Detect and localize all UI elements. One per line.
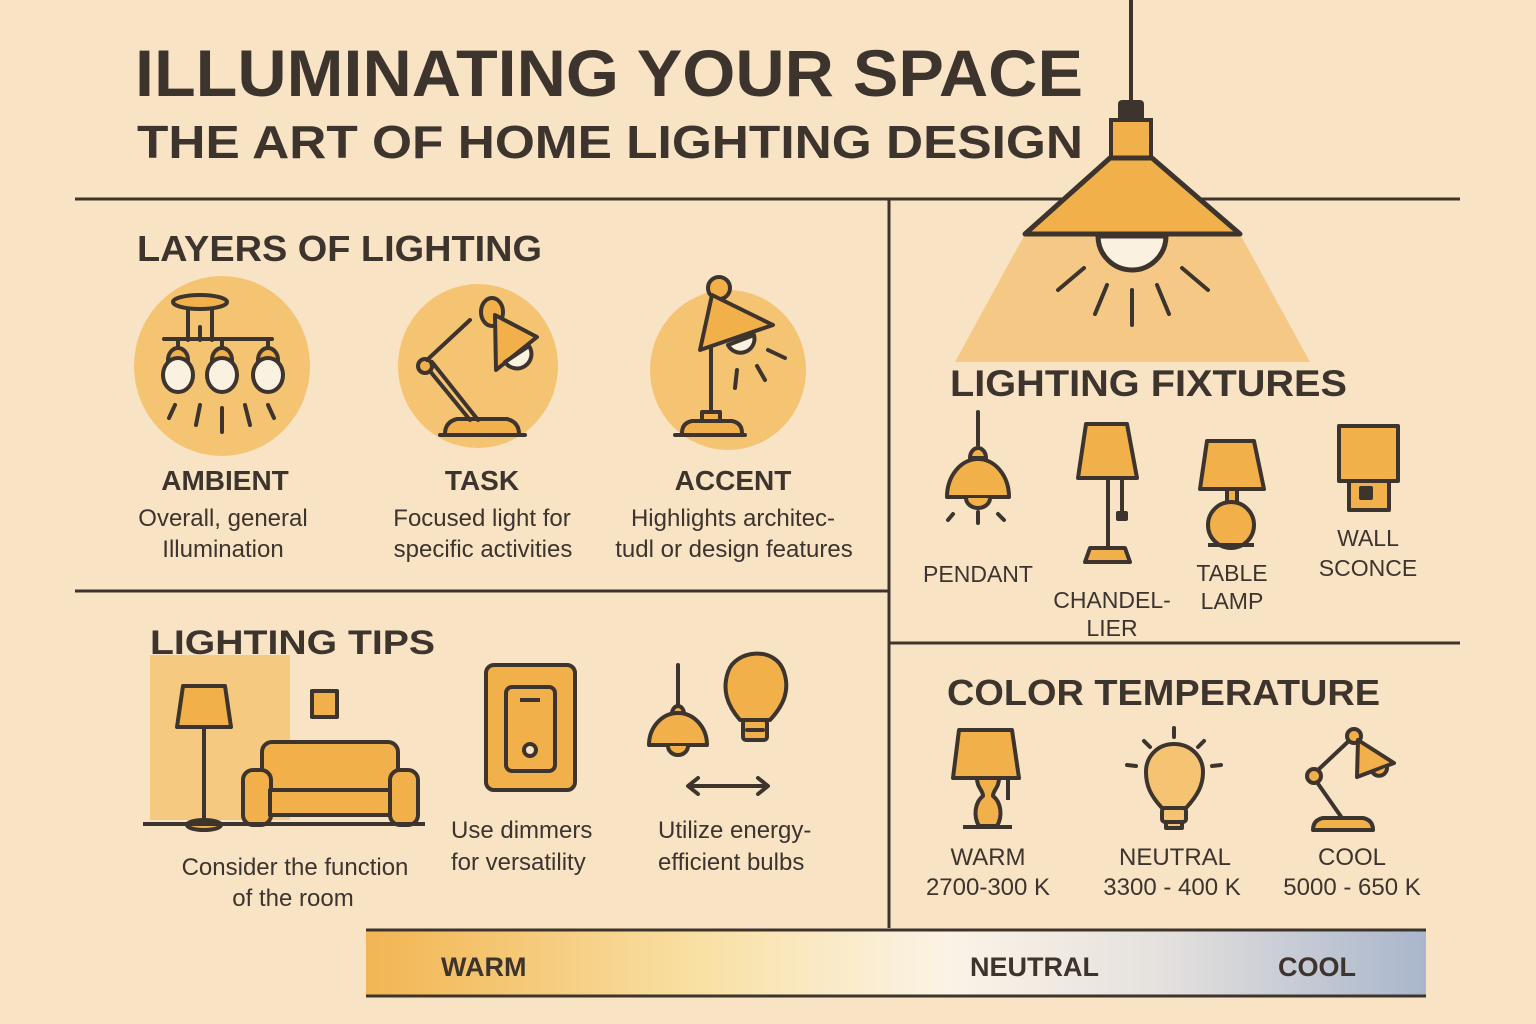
text: task	[393, 465, 572, 563]
text: ambient: AMBIENT	[161, 465, 289, 496]
color temp labels: 2700-300 K	[926, 874, 1050, 901]
fixture labels: CHANDEL-	[1053, 587, 1171, 613]
gradient temperature bar: COOL	[1278, 952, 1356, 982]
gradient temperature bar	[366, 930, 1426, 996]
fixture labels: SCONCE	[1319, 555, 1417, 581]
heading: lighting tips: LIGHTING TIPS	[150, 624, 435, 662]
icon: pendant and bulb with arrow	[649, 654, 786, 794]
icon: table lamp	[1200, 441, 1264, 548]
text: accent: Highlights architec-	[631, 505, 835, 532]
color temp labels: NEUTRAL	[1119, 844, 1231, 871]
color temp labels	[926, 844, 1421, 901]
color temp labels: WARM	[950, 844, 1026, 871]
text: task: TASK	[445, 465, 519, 496]
text: task: Focused light for	[393, 505, 571, 532]
fixture labels: WALL	[1337, 525, 1399, 551]
icon: hanging pendant light with beam	[955, 0, 1310, 362]
fixture labels: LAMP	[1201, 588, 1263, 614]
text: accent: tudl or design features	[615, 536, 853, 563]
heading: layers of lighting: LAYERS OF LIGHTING	[137, 228, 542, 269]
icon: task desk lamp	[398, 284, 558, 448]
text: consider function	[182, 854, 408, 912]
title: ILLUMINATING YOUR SPACE	[135, 36, 1083, 110]
icon: ambient chandelier bulbs	[163, 340, 283, 432]
icon: warm lamp	[953, 730, 1019, 827]
fixture labels: PENDANT	[923, 561, 1033, 587]
icon: chandelier floor lamp	[1078, 424, 1137, 562]
gradient temperature bar: WARM	[441, 952, 526, 982]
icon: accent lamp	[650, 277, 806, 450]
icon: cool desk lamp	[1307, 729, 1394, 830]
fixture labels	[923, 525, 1417, 641]
title: THE ART OF HOME LIGHTING DESIGN	[137, 116, 1083, 168]
text: energy efficient	[658, 817, 811, 876]
text: task: specific activities	[394, 536, 572, 563]
text: dimmers	[451, 817, 592, 876]
text: dimmers: Use dimmers	[451, 817, 592, 844]
icon: pendant	[947, 412, 1009, 523]
heading: lighting tips	[150, 624, 435, 820]
icon: living room	[143, 686, 425, 830]
text: accent	[615, 465, 853, 563]
text: ambient	[138, 465, 308, 563]
text: accent: ACCENT	[675, 465, 791, 496]
icon: ambient chandelier	[134, 276, 310, 456]
text: consider function: of the room	[232, 885, 354, 912]
text: ambient: Overall, general	[138, 505, 308, 532]
fixture labels: LIER	[1086, 615, 1138, 641]
color temp labels: COOL	[1318, 844, 1386, 871]
text: energy efficient: Utilize energy-	[658, 817, 811, 844]
title	[135, 36, 1083, 168]
color temp labels: 5000 - 650 K	[1283, 874, 1421, 901]
heading: lighting fixtures: LIGHTING FIXTURES	[950, 363, 1347, 404]
text: energy efficient: efficient bulbs	[658, 849, 804, 876]
heading: color temperature: COLOR TEMPERATURE	[947, 672, 1380, 713]
icon: neutral bulb	[1127, 728, 1221, 828]
text: dimmers: for versatility	[451, 849, 586, 876]
color temp labels: 3300 - 400 K	[1103, 874, 1241, 901]
text: consider function: Consider the function	[182, 854, 408, 881]
fixture labels: TABLE	[1196, 560, 1268, 586]
icon: wall sconce	[1339, 426, 1398, 510]
icon: dimmer switch	[486, 665, 575, 790]
gradient temperature bar: NEUTRAL	[970, 952, 1099, 982]
text: ambient: Illumination	[162, 536, 284, 563]
